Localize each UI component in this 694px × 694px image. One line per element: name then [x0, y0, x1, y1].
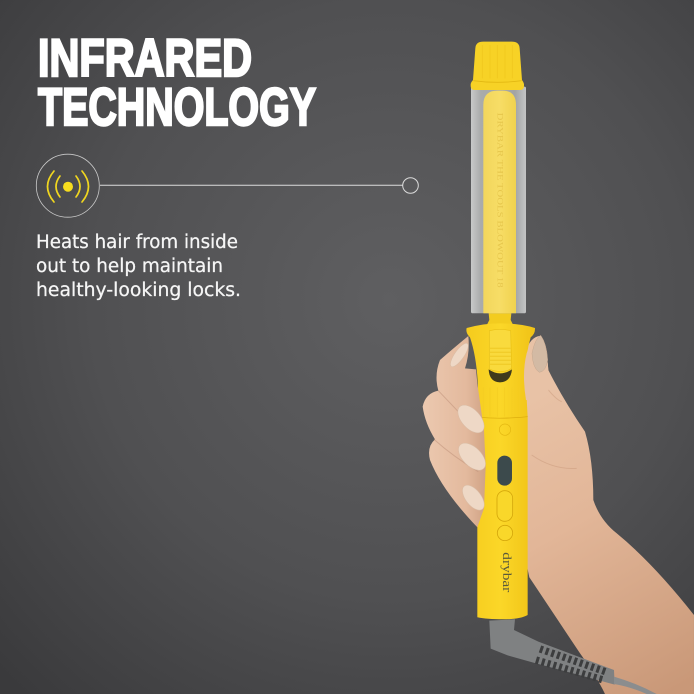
description text: healthy-looking locks. — [36, 280, 241, 301]
fingers — [423, 336, 490, 527]
button ring — [499, 424, 511, 435]
title: INFRARED — [38, 29, 252, 88]
title: TECHNOLOGY — [38, 78, 316, 137]
description text — [36, 232, 241, 301]
barrel cap — [471, 42, 524, 90]
finger nails — [447, 341, 490, 514]
round button — [497, 525, 513, 541]
icon: infrared signal — [36, 154, 99, 217]
description text: Heats hair from inside — [36, 232, 238, 253]
description text: out to help maintain — [36, 256, 223, 277]
palm crease — [532, 390, 577, 468]
slider clip — [489, 329, 512, 371]
curling iron barrel — [471, 42, 526, 327]
rotating collar ridges — [483, 387, 519, 417]
thumb — [524, 335, 548, 400]
display window — [497, 456, 512, 486]
callout line with end marker — [100, 178, 418, 193]
barrel engraved text: DRYBAR THE TOOLS BLOWOUT 18 — [495, 113, 504, 288]
brand logo: drybar — [500, 552, 514, 592]
thumb nail — [532, 335, 548, 372]
cord strain relief — [489, 619, 657, 694]
collar seam — [478, 417, 528, 418]
hand and handle — [423, 323, 694, 694]
palm and forearm — [520, 336, 694, 694]
glass sleeve — [471, 87, 526, 313]
barrel stem — [486, 310, 514, 327]
handle — [466, 323, 535, 619]
title — [38, 29, 316, 137]
yellow barrel core — [483, 91, 516, 313]
power button — [497, 491, 513, 521]
clip gap — [489, 369, 512, 382]
